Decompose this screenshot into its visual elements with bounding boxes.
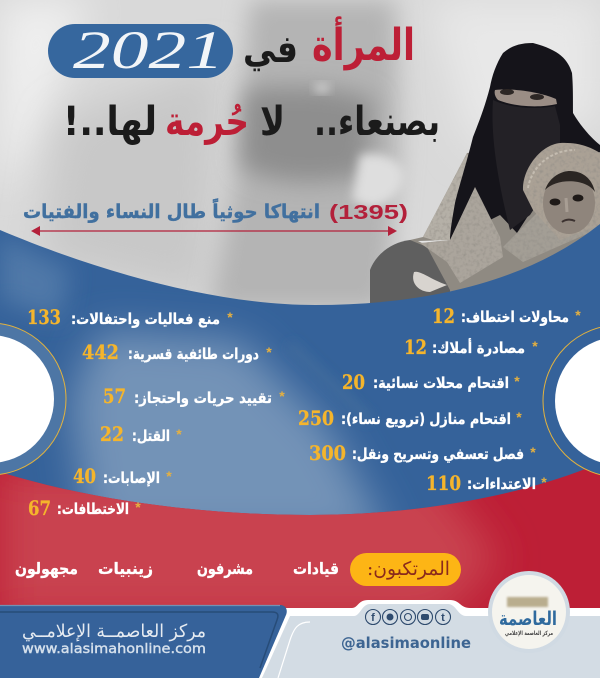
title [48, 16, 440, 145]
stat: restricting freedoms and detention: تقييد حريات واحتجاز: [134, 389, 272, 407]
social icons: t [441, 612, 445, 624]
stat: abductions [28, 496, 141, 520]
stat: killing: 22 [100, 422, 124, 446]
footer: blue media centre panel [0, 605, 287, 678]
stat: property confiscation: مصادرة أملاك: [432, 338, 525, 357]
stat: storming women's shops: * [514, 373, 520, 389]
stat: assaults: * [541, 474, 547, 490]
shawl: front [420, 187, 503, 283]
logo badge: مركز العاصمة الإعلامي [505, 630, 553, 637]
stat: injuries: الإصابات: [103, 469, 160, 487]
title: في [243, 27, 298, 71]
bare foot [413, 272, 447, 292]
social handle: @alasimaonline [341, 634, 471, 652]
panel: blue wave [0, 224, 600, 540]
stat: storming homes: * [516, 409, 522, 425]
stat: injuries: 40 [73, 464, 96, 488]
perpetrators list: مشرفون [197, 559, 253, 578]
subtitle: 1395 violations [23, 198, 408, 224]
stat: injuries [73, 464, 172, 488]
subtitle: 1395 violations: (1395) [329, 202, 408, 224]
stat: killing: * [176, 426, 182, 442]
stat: forced sectarian courses: دورات طائفية قسرية: [128, 345, 259, 363]
panel: red wave [0, 469, 600, 608]
stat: storming women's shops [342, 370, 520, 394]
footer: blue media centre panel: www.alasimahonline.com [22, 642, 206, 657]
decorative circle: left [0, 323, 66, 475]
year pill [48, 20, 233, 80]
stat: assaults: 110 [426, 471, 461, 495]
stat: forced sectarian courses: 442 [82, 340, 119, 364]
title: لها..! [63, 99, 157, 145]
stat: banning events: منع فعاليات واحتفالات: [71, 310, 220, 328]
stat: banning events: * [227, 309, 233, 325]
stat: storming homes: 250 [298, 406, 334, 430]
background photo: blurred veiled figure [0, 0, 600, 320]
stat: property confiscation [404, 335, 538, 359]
stat: storming women's shops: اقتحام محلات نسائية: [373, 374, 509, 392]
base clothing [410, 150, 600, 305]
stat: forced sectarian courses [82, 340, 272, 364]
logo badge [488, 571, 570, 653]
stat: attempted kidnappings: * [575, 307, 581, 323]
perpetrators label pill [350, 553, 461, 586]
stat: restricting freedoms and detention: 57 [103, 384, 126, 408]
stat: attempted kidnappings: محاولات اختطاف: [461, 308, 569, 326]
knee and robe [370, 240, 450, 305]
footer: blue media centre panel: مركز العاصمــة الإعلامــي [22, 621, 206, 642]
stat: arbitrary dismissal: 300 [309, 441, 346, 465]
stat: abductions: الاختطافات: [57, 500, 129, 518]
social icons: f [371, 612, 375, 624]
stat: killing [100, 422, 182, 446]
white cloth [418, 240, 470, 252]
stat: restricting freedoms and detention: * [279, 388, 285, 404]
decorative circle: right [543, 325, 600, 477]
stat: killing: القتل: [132, 427, 170, 445]
stat: banning events [27, 305, 233, 329]
stat: assaults: الاعتداءات: [467, 475, 536, 493]
stat: attempted kidnappings [432, 304, 581, 328]
child bonnet [523, 143, 600, 240]
perpetrators list: مجهولون [15, 559, 78, 578]
perpetrators list: زينبيات [98, 559, 153, 578]
stat: property confiscation: * [532, 338, 538, 354]
stat: abductions: 67 [28, 496, 51, 520]
stat: forced sectarian courses: * [266, 344, 272, 360]
shawl: left [423, 153, 480, 245]
title: بصنعاء.. [314, 99, 440, 145]
stat: storming women's shops: 20 [342, 370, 365, 394]
perpetrators list [15, 559, 339, 578]
stat: restricting freedoms and detention [103, 384, 285, 408]
footer: light panel [0, 600, 600, 678]
photo: woman in niqab holding a child [370, 43, 600, 305]
stat: abductions: * [135, 499, 141, 515]
title: المرأة [312, 16, 415, 71]
eye slit [495, 89, 557, 106]
stat: property confiscation: 12 [404, 335, 427, 359]
stat: arbitrary dismissal: فصل تعسفي وتسريح ونقل: [352, 445, 524, 463]
stat: arbitrary dismissal: * [530, 444, 536, 460]
stat: arbitrary dismissal [309, 441, 536, 465]
stat: assaults [426, 471, 547, 495]
child face [543, 172, 595, 234]
year pill: 2021 [73, 20, 224, 80]
stat: attempted kidnappings: 12 [432, 304, 455, 328]
black veil [450, 43, 600, 240]
arrow: double-headed red [31, 226, 397, 236]
perpetrators label pill: المرتكبون: [367, 558, 450, 580]
stat: storming homes: اقتحام منازل (ترويع نساء): [341, 410, 511, 428]
stat: banning events: 133 [27, 305, 61, 329]
title: لا [260, 99, 285, 145]
perpetrators list: قيادات [293, 559, 339, 578]
subtitle: 1395 violations: انتهاكا حوثياً طال النساء والفتيات [23, 198, 320, 223]
stat: storming homes [298, 406, 522, 430]
stat: injuries: * [166, 468, 172, 484]
title: حُرمة [165, 99, 249, 145]
social icons [366, 610, 450, 624]
logo badge: العاصمة [499, 608, 557, 630]
